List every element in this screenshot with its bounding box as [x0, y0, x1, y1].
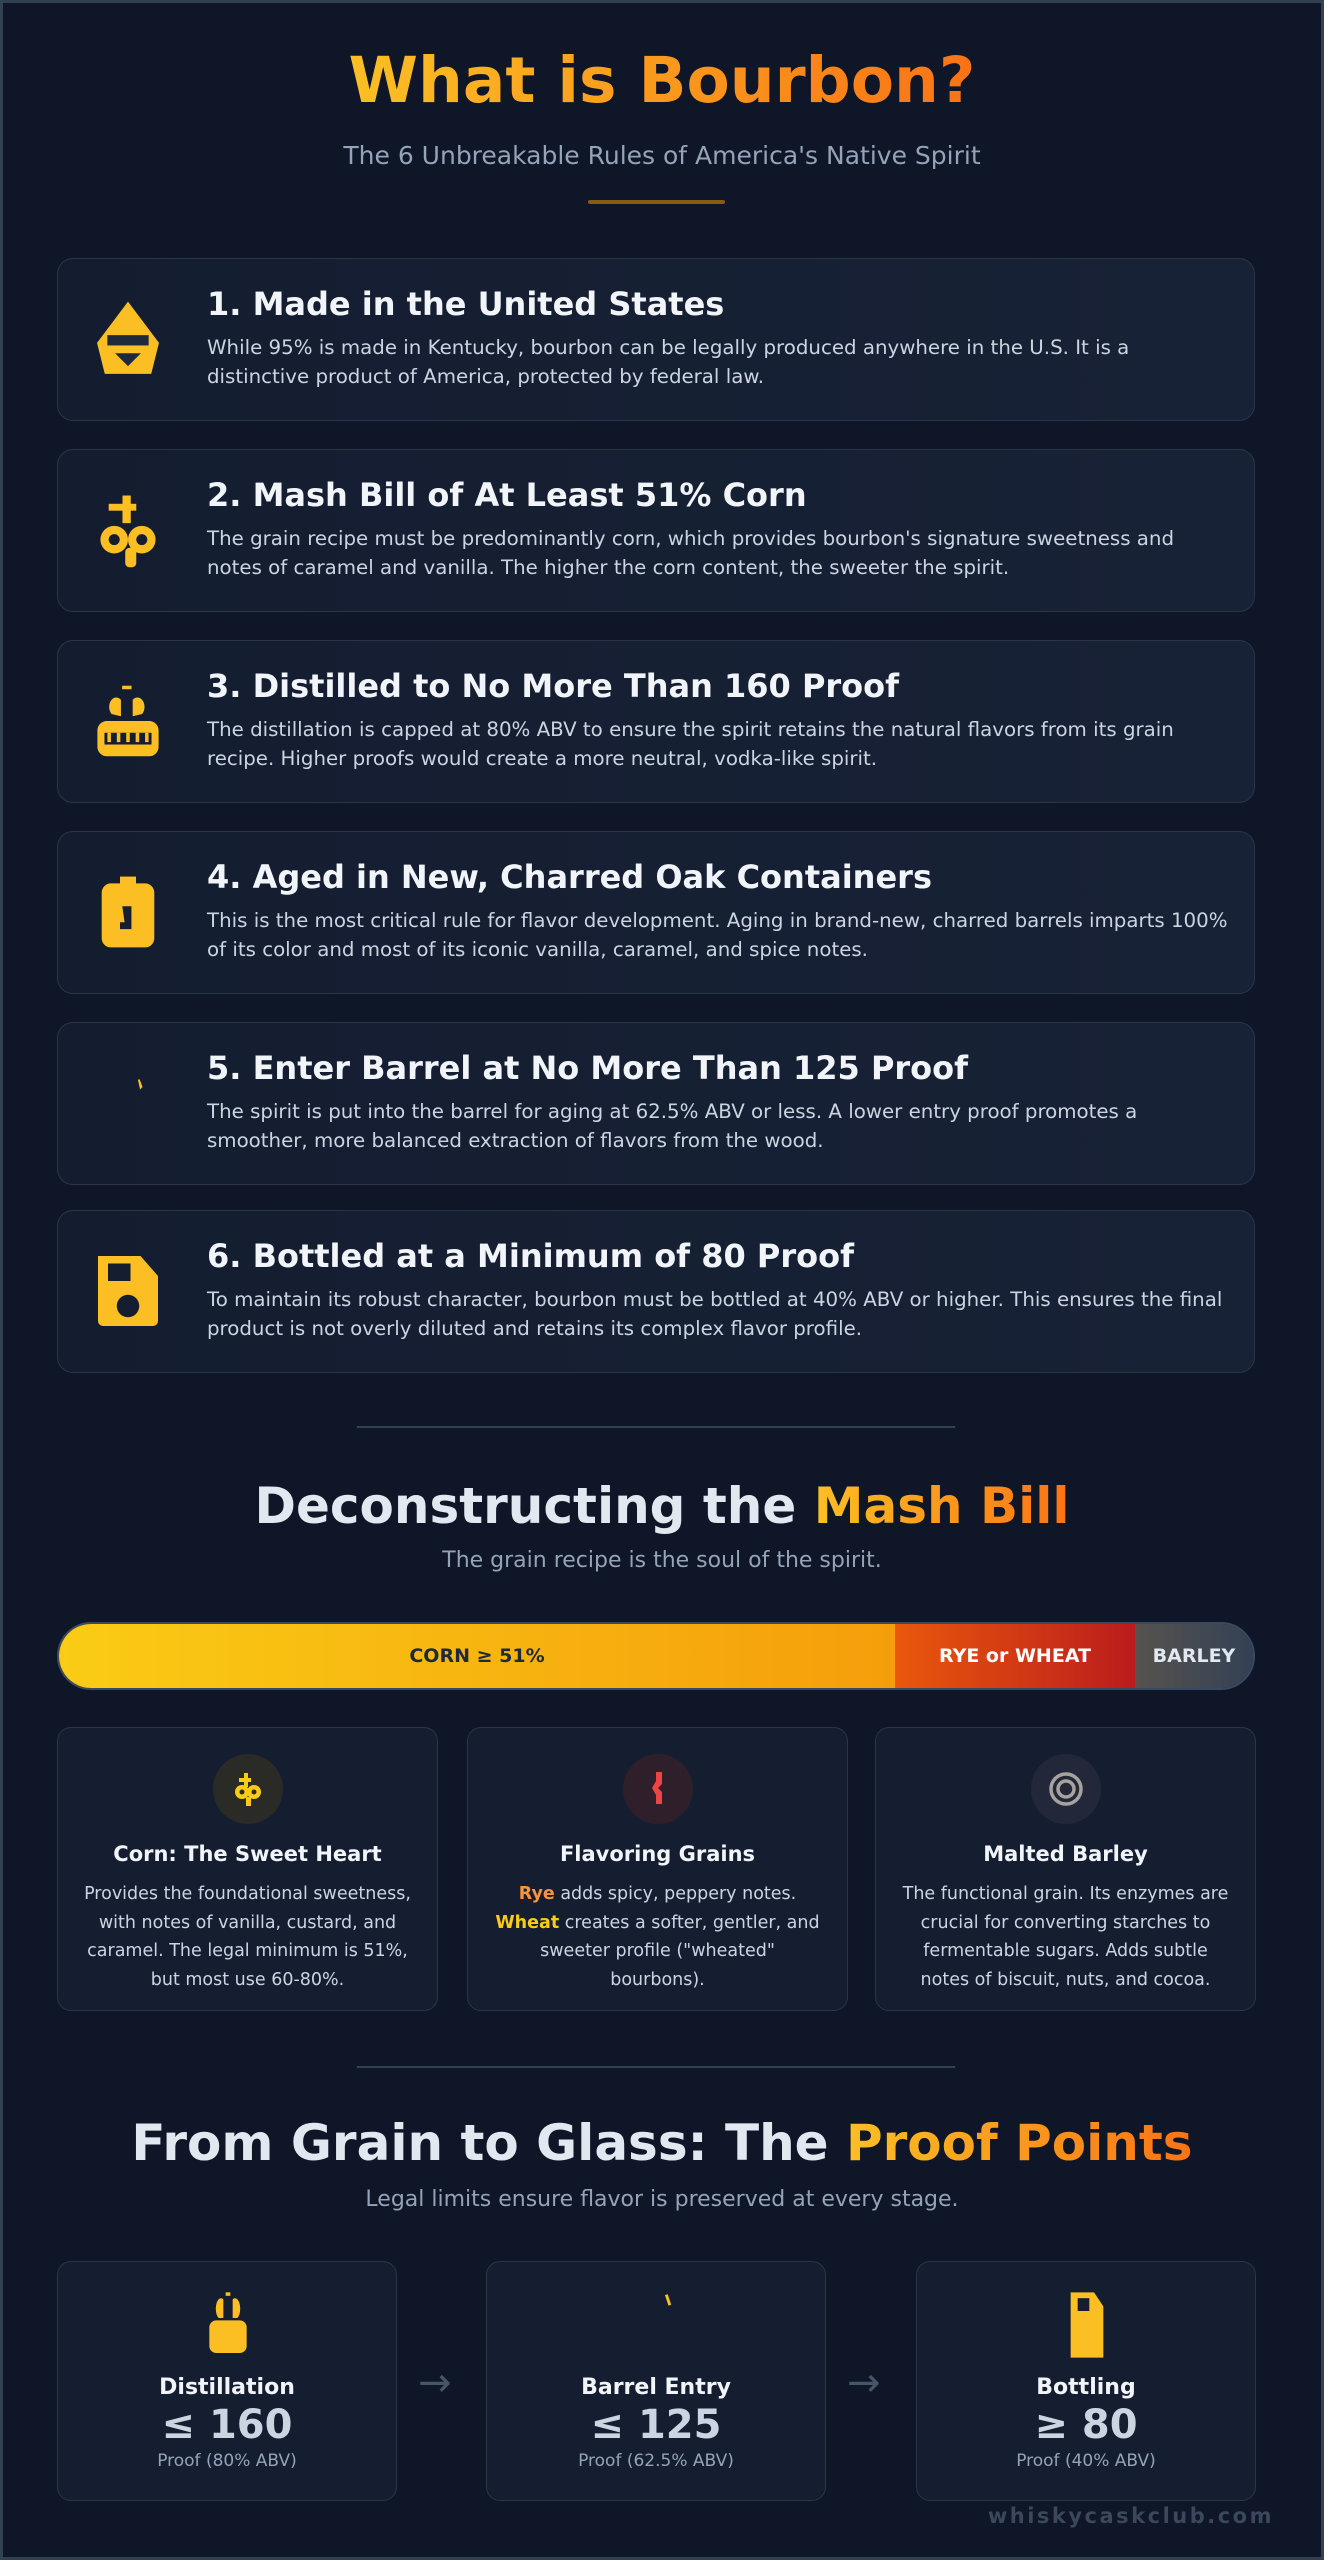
icon: container	[102, 876, 154, 948]
subtitle: proof points: Legal limits ensure flavor is preserved at every stage.	[365, 2187, 959, 2212]
icon: rye	[623, 1754, 693, 1824]
icon: barrel (broken glyph)	[138, 1079, 142, 1090]
panel: rule 5: The spirit is put into the barrel for aging at 62.5% ABV or less. A lower entry proof promotes a smoother, more balanced extraction of flavors from the wood.	[207, 1100, 1137, 1152]
panel: malted barley: Malted Barley	[983, 1842, 1148, 1866]
panel: barrel entry: Barrel Entry	[581, 2375, 731, 2400]
title: What is Bourbon?	[349, 44, 975, 117]
panel: rule 6: To maintain its robust character, bourbon must be bottled at 40% ABV or higher. This ensures the final product is not overly diluted and retains its complex flavor profile.	[207, 1288, 1222, 1340]
panel: barrel entry: ≤ 125	[591, 2402, 721, 2448]
panel: rule 4: 4. Aged in New, Charred Oak Containers	[207, 858, 932, 896]
panel: distillation: ≤ 160	[162, 2402, 292, 2448]
icon: corn	[100, 496, 156, 568]
icon: barley	[1031, 1754, 1101, 1824]
watermark: whiskycaskclub.com	[988, 2504, 1274, 2528]
bar chart: mash bill: BARLEY	[1153, 1645, 1235, 1667]
panel: bottling: Proof (40% ABV)	[1016, 2451, 1156, 2471]
subtitle: mash bill: The grain recipe is the soul of the spirit.	[442, 1548, 882, 1573]
bar chart: mash bill: CORN ≥ 51%	[409, 1645, 545, 1667]
panel: distillation	[57, 2261, 397, 2501]
panel: bottling	[916, 2261, 1256, 2501]
panel: rule 6: 6. Bottled at a Minimum of 80 Proof	[207, 1237, 854, 1275]
panel: malted barley: The functional grain. Its enzymes are crucial for converting starches to fermentable sugars. Adds subtle notes of biscuit, nuts, and cocoa.	[903, 1884, 1228, 1990]
panel: flavoring grains: Rye adds spicy, peppery notes.	[519, 1884, 796, 1904]
panel: distillation: Distillation	[159, 2375, 295, 2400]
panel: rule 1: While 95% is made in Kentucky, bourbon can be legally produced anywhere in the U.S. It is a distinctive product of America, protected by federal law.	[207, 336, 1129, 388]
panel: rule 4: This is the most critical rule for flavor development. Aging in brand-new, charred barrels imparts 100% of its color and most of its iconic vanilla, caramel, and spice notes.	[207, 909, 1228, 961]
icon: bottle	[1070, 2292, 1104, 2358]
bar chart: mash bill: RYE or WHEAT	[939, 1645, 1091, 1667]
icon: corn	[213, 1754, 283, 1824]
heading: proof points: From Grain to Glass: The Proof Points	[131, 2114, 1193, 2172]
bar chart: mash bill	[57, 1622, 1255, 1690]
panel: flavoring grains	[467, 1727, 848, 2011]
icon: barrel (broken glyph)	[665, 2294, 672, 2306]
panel: rule 3: The distillation is capped at 80% ABV to ensure the spirit retains the natural flavors from its grain recipe. Higher proofs would create a more neutral, vodka-like spirit.	[207, 718, 1174, 770]
panel: rule 5: 5. Enter Barrel at No More Than 125 Proof	[207, 1049, 968, 1087]
panel: malted barley	[875, 1727, 1256, 2011]
heading: mash bill: Deconstructing the Mash Bill	[254, 1477, 1070, 1535]
icon: flag	[97, 302, 159, 374]
panel: rule 3	[57, 640, 1255, 803]
panel: barrel entry	[486, 2261, 826, 2501]
icon: still	[209, 2292, 247, 2353]
arrow: →	[418, 2360, 452, 2406]
panel: rule 5	[57, 1022, 1255, 1185]
panel: rule 2: 2. Mash Bill of At Least 51% Corn	[207, 476, 807, 514]
panel: rule 6	[57, 1210, 1255, 1373]
panel: rule 2	[57, 449, 1255, 612]
panel: rule 3: 3. Distilled to No More Than 160 Proof	[207, 667, 899, 705]
panel: rule 1	[57, 258, 1255, 421]
panel: flavoring grains: Wheat creates a softer, gentler, and sweeter profile ("wheated" bourbons).	[495, 1912, 820, 1990]
panel: rule 1: 1. Made in the United States	[207, 285, 724, 323]
panel: flavoring grains: Flavoring Grains	[560, 1842, 755, 1866]
panel: rule 2: The grain recipe must be predominantly corn, which provides bourbon's signature sweetness and notes of caramel and vanilla. The higher the corn content, the sweeter the spirit.	[207, 527, 1174, 579]
subtitle: The 6 Unbreakable Rules of America's Native Spirit	[343, 141, 981, 170]
panel: bottling: ≥ 80	[1034, 2402, 1138, 2448]
panel: corn: Corn: The Sweet Heart	[113, 1842, 382, 1866]
panel: rule 4	[57, 831, 1255, 994]
icon: bottle	[98, 1256, 158, 1326]
panel: barrel entry: Proof (62.5% ABV)	[578, 2451, 734, 2471]
panel: corn: Provides the foundational sweetness, with notes of vanilla, custard, and caramel. The legal minimum is 51%, but most use 60-80%.	[84, 1884, 411, 1990]
panel: corn	[57, 1727, 438, 2011]
panel: distillation: Proof (80% ABV)	[157, 2451, 297, 2471]
panel: bottling: Bottling	[1036, 2375, 1136, 2400]
arrow: →	[847, 2360, 881, 2406]
icon: still	[97, 686, 159, 756]
